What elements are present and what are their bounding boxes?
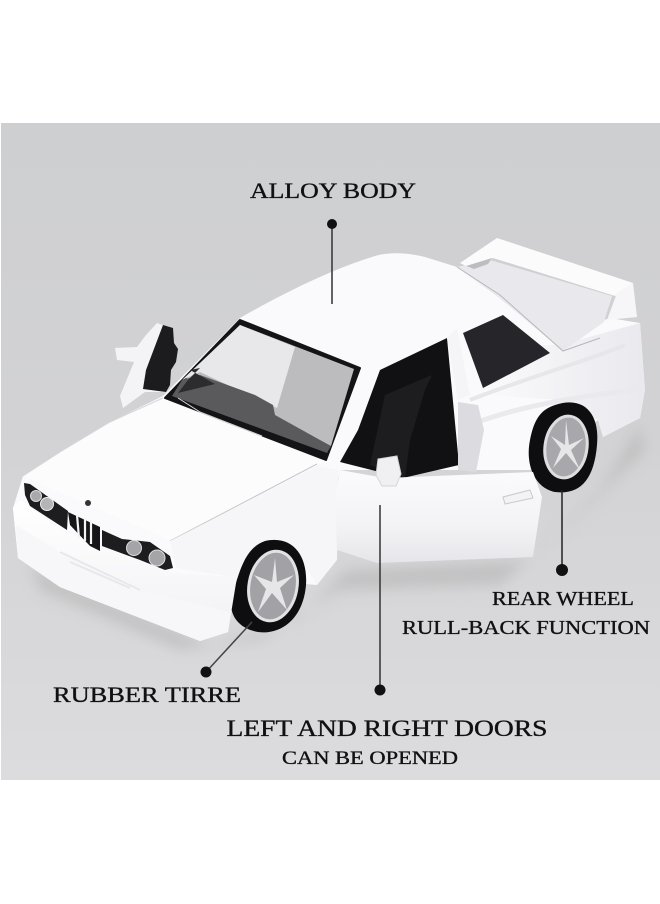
icon: rear wheel [529,402,597,492]
icon: rear side window [463,315,550,388]
icon: door opening and interior [340,328,484,478]
icon: windshield [165,320,360,460]
ground shadow [30,425,645,650]
trunk deck [457,260,612,351]
heading: alloy body: ALLOY BODY [250,178,416,203]
text: rear wheel function: RULL-BACK FUNCTION [402,618,650,639]
rear quarter panel [485,323,645,437]
callout: alloy body [250,178,416,304]
car body [13,238,645,641]
car model [13,238,645,650]
icon: front lights and kidney grille [24,483,173,570]
photo background panel [1,123,660,780]
text: rubber tire: RUBBER TIRRE [53,682,241,707]
text: rear wheel function [402,589,650,639]
icon: front wheel [231,540,306,632]
hood and fender [23,398,325,540]
icon: open front door [335,456,542,563]
text: doors can be opened: CAN BE OPENED [282,749,458,769]
text: doors can be opened [226,716,548,769]
text: rear wheel function: REAR WHEEL [492,589,634,610]
door mirror [376,456,401,486]
callout: doors [226,505,548,769]
callout: rear wheel [402,490,650,639]
icon: rear spoiler [460,238,637,320]
callout: rubber tire [53,622,252,707]
icon: far-side open door [115,323,178,408]
text: doors can be opened: LEFT AND RIGHT DOORS [226,716,548,742]
front bumper [13,500,237,641]
